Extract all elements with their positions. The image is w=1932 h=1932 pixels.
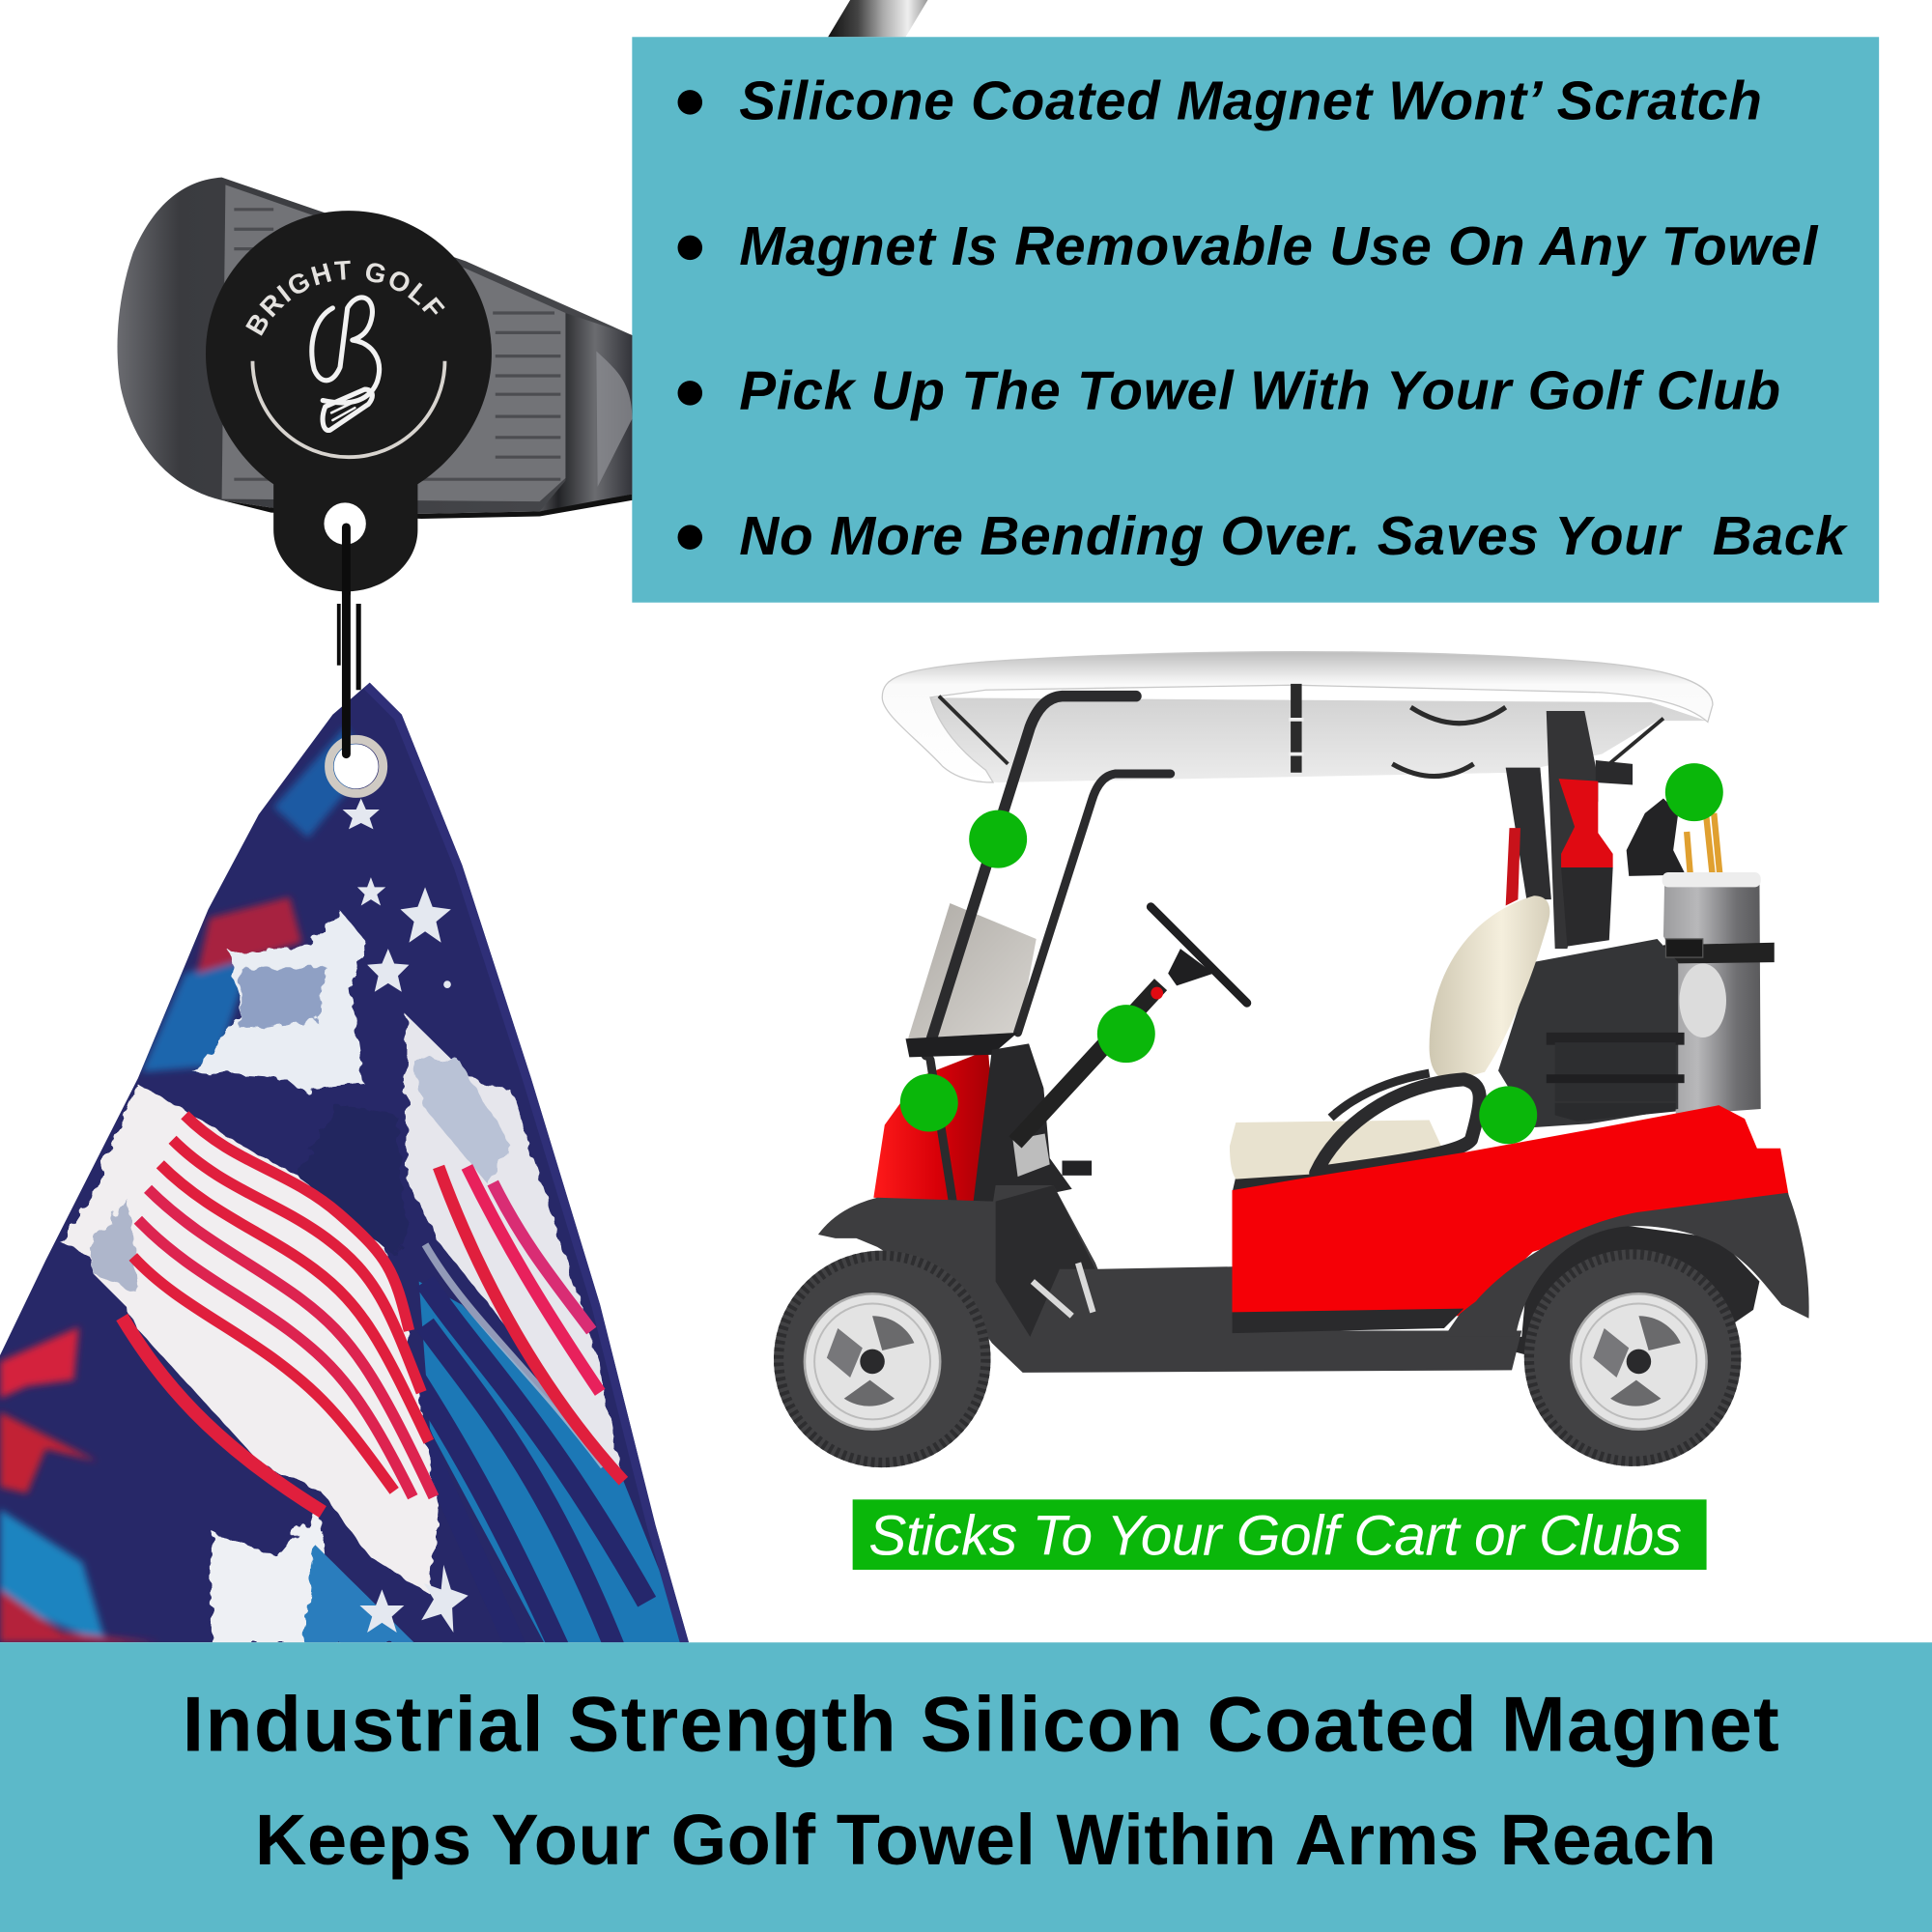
golf bag pocket bbox=[1680, 963, 1726, 1037]
dash panel controls bbox=[996, 1133, 1092, 1207]
magnet hole bbox=[324, 502, 366, 545]
towel with flag print bbox=[0, 678, 702, 1651]
water bottle red top bbox=[1559, 779, 1613, 867]
rear wheel bbox=[1524, 1249, 1741, 1466]
front armrest bbox=[1316, 1079, 1480, 1173]
towel grommet bbox=[329, 739, 384, 793]
magnet location dots bbox=[900, 763, 1723, 1144]
bullet: no more bending: No More Bending Over. Saves Your Back bbox=[739, 506, 1848, 567]
golf bag belt bbox=[1663, 943, 1775, 963]
logo script B bbox=[312, 298, 380, 430]
golf cart bbox=[774, 652, 1809, 1467]
green caption: Sticks To Your Golf Cart or Clubs bbox=[868, 1505, 1682, 1568]
bullet: silicone coated: Silicone Coated Magnet Wont’ Scratch bbox=[739, 71, 1762, 132]
front body red bbox=[873, 1050, 1001, 1208]
seat back bbox=[1430, 895, 1549, 1082]
icon: golf club shaft at top bbox=[828, 0, 927, 37]
towel large star shapes bbox=[60, 912, 618, 1644]
steering column bbox=[1015, 984, 1161, 1142]
belt buckle bbox=[1665, 939, 1703, 957]
bottom banner bbox=[0, 1642, 1932, 1932]
dash column bbox=[974, 1043, 1072, 1205]
towel patches bbox=[0, 727, 370, 1644]
towel blue band lower right bbox=[412, 1244, 689, 1651]
cart rear bag group bbox=[1627, 799, 1775, 1115]
bullet: removable: Magnet Is Removable Use On Any Towel bbox=[739, 216, 1819, 277]
water bottle lower bbox=[1561, 867, 1613, 947]
logo arc text: BRIGHT GOLF bbox=[245, 261, 445, 336]
rear rim bbox=[1571, 1293, 1707, 1430]
storage box bbox=[1547, 1033, 1685, 1122]
logo lower arc bbox=[252, 361, 444, 457]
golf bag body bbox=[1663, 877, 1761, 1115]
golf club head bbox=[117, 178, 632, 519]
front wheel bbox=[774, 1251, 991, 1467]
windshield base bbox=[906, 1033, 1018, 1057]
steering wheel bbox=[1151, 907, 1247, 1003]
rear armrest bbox=[1331, 1073, 1430, 1118]
golf club shafts bbox=[1687, 807, 1720, 877]
flag stripes rear bbox=[439, 1167, 623, 1481]
rear storage block bbox=[1498, 939, 1678, 1127]
seat cushion bbox=[1230, 1120, 1444, 1179]
golf club heads bbox=[1627, 799, 1686, 876]
towel scattered stars bbox=[343, 799, 469, 1633]
roof struts and straps bbox=[939, 684, 1663, 777]
bullet: pick up: Pick Up The Towel With Your Golf Club bbox=[739, 360, 1780, 421]
rear fender bbox=[1444, 1193, 1809, 1337]
headline: Industrial Strength Silicon Coated Magnet bbox=[183, 1682, 1779, 1769]
roof top rim bbox=[882, 652, 1713, 782]
front pillars bbox=[926, 696, 1171, 1208]
carabiner clip bbox=[339, 529, 358, 754]
under-seat shadow bbox=[1233, 1171, 1312, 1193]
roof underside bbox=[887, 697, 1707, 782]
carabiner top inside hole bbox=[343, 527, 350, 594]
magnet with Bright Golf logo bbox=[206, 211, 492, 595]
subheadline: Keeps Your Golf Towel Within Arms Reach bbox=[255, 1800, 1717, 1880]
bullet panel bbox=[632, 37, 1879, 603]
red rear body panel bbox=[1233, 1105, 1789, 1319]
golf bag rim bbox=[1662, 872, 1761, 887]
windshield glass bbox=[908, 903, 1037, 1038]
rear wheel well shadow bbox=[1444, 1222, 1759, 1355]
chassis and front fender bbox=[818, 1185, 1521, 1373]
front rim bbox=[805, 1293, 940, 1430]
rear posts bbox=[1506, 768, 1551, 899]
towel binding edge bbox=[370, 683, 689, 1642]
flag stripes front bbox=[122, 1115, 434, 1512]
